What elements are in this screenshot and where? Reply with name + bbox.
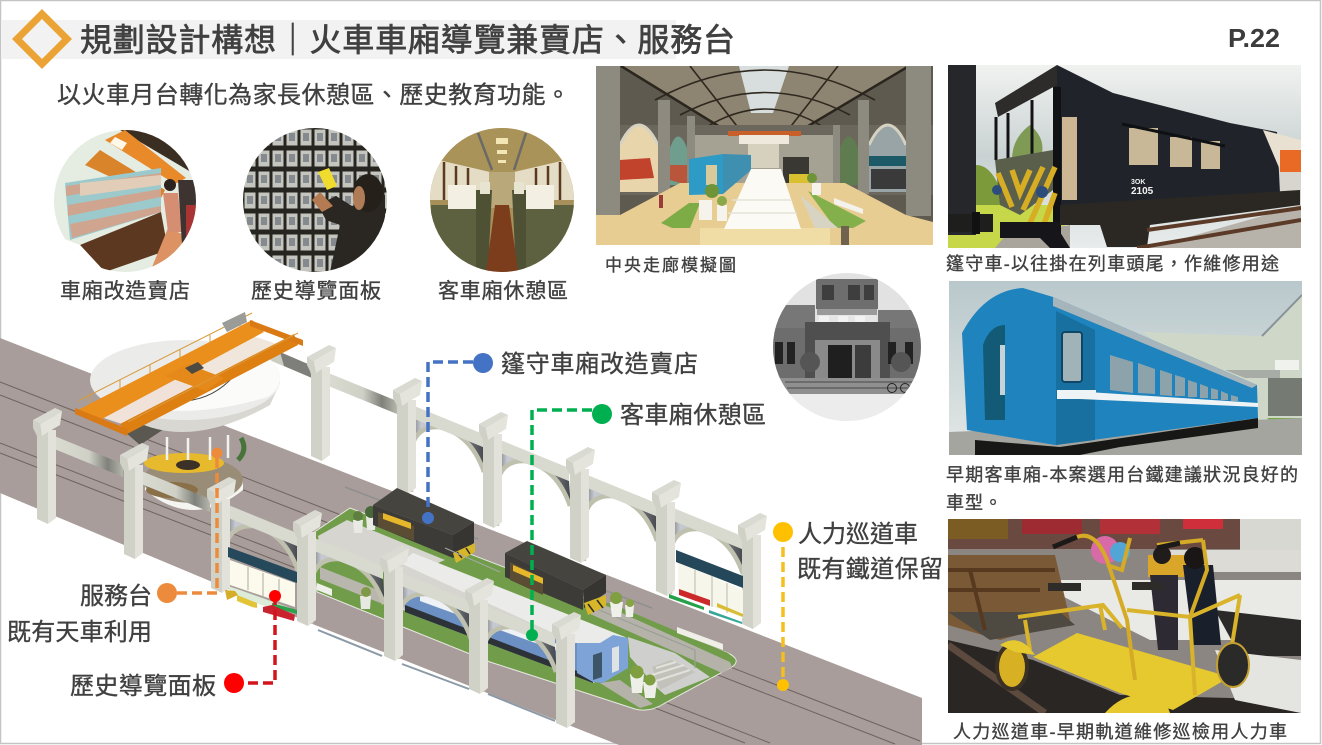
caption: blue passenger coach, line 2: 車型。 (946, 493, 1002, 513)
label: history panels: 歷史導覽面板 (251, 280, 381, 303)
ground (0, 338, 922, 745)
axonometric model of the station platform (0, 312, 922, 745)
photo: central corridor rendering (596, 66, 933, 245)
kiosk carriage 1 (373, 488, 475, 563)
subtitle: 以火車月台轉化為家長休憩區、歷史教育功能。 (57, 82, 570, 109)
photo: brake van: 3OK (1131, 179, 1145, 186)
photo: yellow hand-powered rail cart (948, 519, 1301, 713)
callout: service desk: 既有天車利用 (7, 619, 152, 646)
callout: history panels (70, 590, 281, 700)
planters (353, 506, 657, 698)
rails (0, 382, 920, 744)
caption: central corridor: 中央走廊模擬圖 (605, 256, 736, 275)
title: 規劃設計構想｜火車車廂導覽兼賣店、服務台 (80, 22, 735, 58)
callout: coach rest area: 客車廂休憩區 (620, 402, 766, 429)
central island platform (310, 488, 736, 710)
front colonnade (33, 408, 581, 728)
caption: brake van: 篷守車-以往掛在列車頭尾，作維修用途 (946, 254, 1279, 274)
callout: brake van shop: 篷守車廂改造賣店 (501, 351, 698, 378)
callout: brake van shop (422, 351, 698, 524)
icon: orange diamond (12, 9, 72, 69)
photo circle: historic station (773, 273, 921, 424)
rotunda with existing crane (75, 312, 303, 510)
display wall: back right (669, 550, 743, 624)
label: coach rest area: 客車廂休憩區 (438, 280, 568, 303)
callout: history panels: 歷史導覽面板 (70, 673, 216, 700)
photo circle: coach rest area (430, 128, 574, 272)
page number: P.22 (1228, 23, 1280, 53)
kiosk carriage 2 (505, 541, 606, 615)
back colonnade (262, 345, 767, 629)
photo circle: carriage shop (54, 130, 196, 272)
label: carriage shop: 車廂改造賣店 (60, 280, 190, 303)
crane girders (75, 312, 303, 436)
photo: brake van (948, 65, 1301, 248)
photo: blue passenger coach (949, 281, 1302, 455)
display wall: front left (225, 547, 297, 621)
callout: service desk (7, 448, 222, 646)
callout: hand rail cart: 既有鐵道保留 (797, 556, 943, 583)
caption: rail cart: 人力巡道車-早期軌道維修巡檢用人力車 (953, 722, 1287, 742)
title band (1, 20, 676, 59)
caption: blue passenger coach: 早期客車廂-本案選用台鐵建議狀況良好的 (946, 465, 1298, 485)
white bench (677, 627, 723, 650)
callout: hand rail cart: 人力巡道車 (798, 521, 918, 548)
photo circle: history panels (243, 128, 387, 272)
callout: coach rest area (526, 402, 766, 641)
white bench, left (317, 583, 332, 596)
passenger coach (400, 553, 628, 683)
callout: service desk: 服務台 (80, 583, 152, 610)
callout: hand rail cart (773, 521, 943, 691)
photo: brake van: 2105 (1131, 186, 1154, 197)
